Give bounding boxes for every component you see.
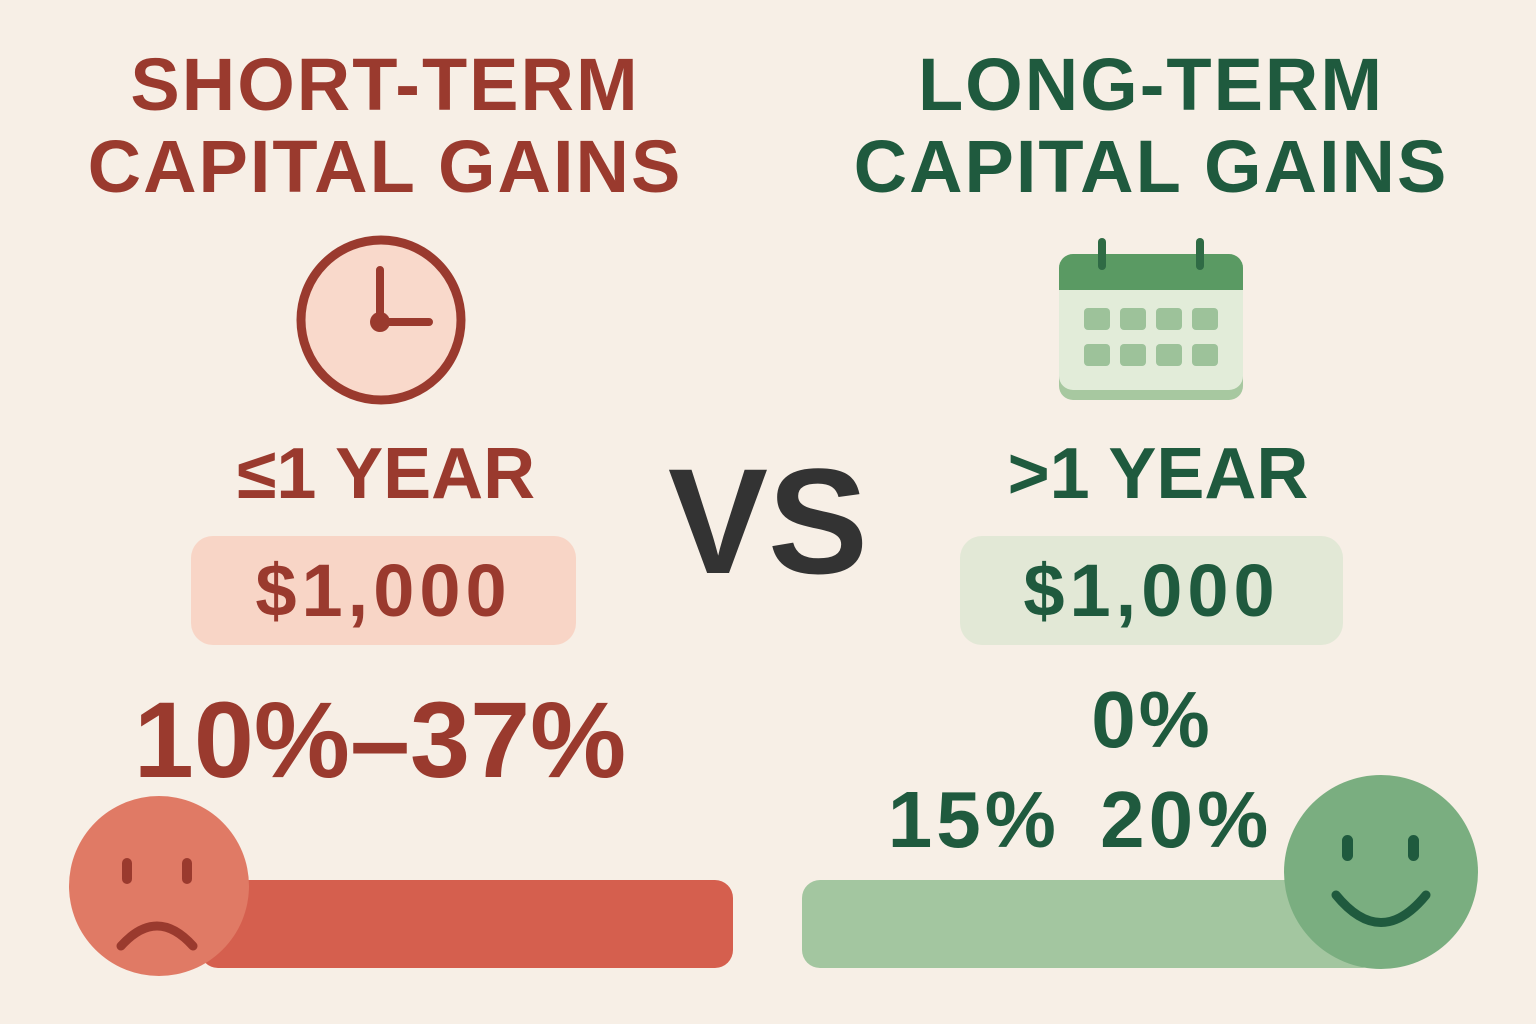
- icon: clock: [296, 236, 466, 404]
- label: ≤1 year: ≤1 YEAR: [237, 434, 535, 514]
- title: short-term: CAPITAL GAINS: [88, 125, 682, 208]
- pill: red amount: $1,000: [255, 549, 512, 632]
- icon: sad face: [69, 796, 249, 976]
- icon: happy face: [1284, 775, 1478, 969]
- title: long-term: [854, 43, 1448, 208]
- VS: VS: [668, 437, 868, 605]
- title: long-term: CAPITAL GAINS: [854, 125, 1448, 208]
- icon: calendar: [1059, 238, 1243, 400]
- title: short-term: SHORT-TERM: [130, 43, 640, 126]
- rate: 15% 20%: 15% 20%: [888, 775, 1272, 864]
- bar: green: [802, 880, 1380, 968]
- pill: green amount: [960, 536, 1343, 645]
- label: >1 year: >1 YEAR: [1008, 434, 1308, 514]
- title: short-term: [88, 43, 682, 208]
- pill: green amount: $1,000: [1023, 549, 1280, 632]
- title: long-term: LONG-TERM: [918, 43, 1384, 126]
- rate: long-term: [888, 675, 1272, 864]
- rate: 0%: 0%: [1091, 675, 1213, 764]
- bar: red: [200, 880, 733, 968]
- rate: short-term: 10%–37%: [134, 679, 626, 800]
- pill: red amount: [191, 536, 576, 645]
